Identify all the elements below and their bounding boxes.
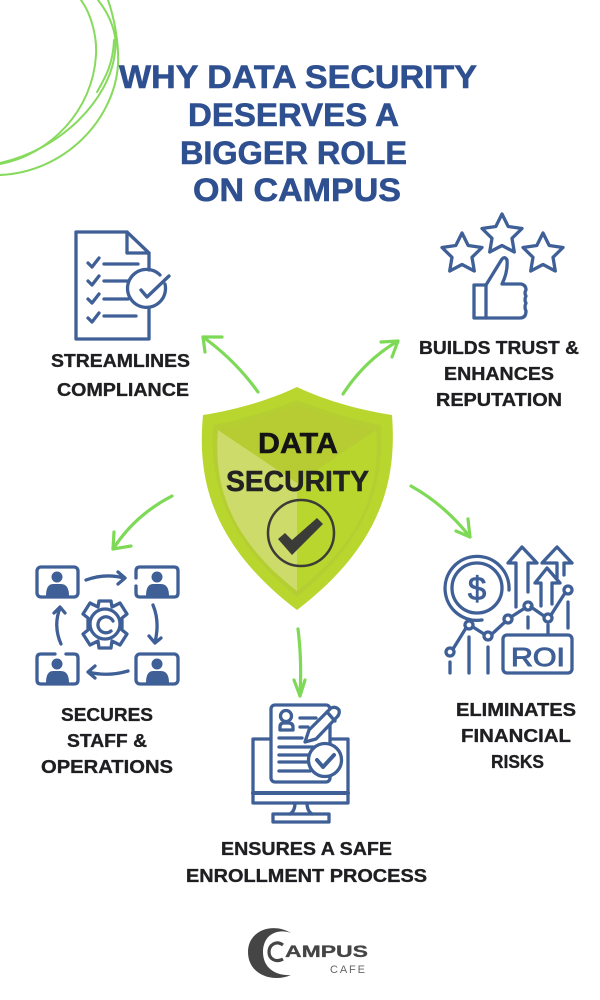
label: streamlines compliance: [51, 350, 190, 400]
title: WHY DATA SECURITY: [119, 59, 477, 95]
shield: data security: DATA: [258, 428, 338, 460]
label: secures staff: STAFF &: [67, 730, 147, 751]
icon: enrollment on monitor: [253, 705, 348, 822]
label: secures staff: SECURES: [61, 704, 153, 725]
label: ensures safe enrollment: [186, 838, 427, 886]
logo: Campus Cafe: AMPUS: [285, 942, 368, 961]
icon: ROI growth: [445, 547, 572, 673]
icon: ROI growth: ROI: [511, 642, 565, 672]
icon: compliance checklist: [76, 232, 169, 339]
title: DESERVES A: [188, 97, 399, 133]
label: streamlines compliance: STREAMLINES: [51, 350, 190, 371]
label: secures staff: OPERATIONS: [41, 756, 173, 777]
arrow: to trust: [343, 341, 398, 394]
title: [119, 59, 477, 208]
logo: Campus Cafe: CAFE: [330, 964, 365, 976]
title: ON CAMPUS: [193, 172, 401, 208]
label: streamlines compliance: COMPLIANCE: [57, 379, 189, 400]
arrow: to compliance: [203, 337, 258, 392]
arrow: to staff and operations: [113, 496, 172, 549]
label: builds trust: BUILDS TRUST &: [419, 337, 579, 358]
label: secures staff: [41, 704, 173, 777]
arrow: to enrollment: [294, 629, 305, 696]
label: eliminates financial risks: [456, 699, 576, 772]
label: eliminates financial risks: ELIMINATES: [456, 699, 576, 720]
icon: stars and thumbs up: [442, 214, 563, 318]
label: builds trust: [419, 337, 579, 410]
label: ensures safe enrollment: ENROLLMENT PROCESS: [186, 865, 427, 886]
label: ensures safe enrollment: ENSURES A SAFE: [221, 838, 392, 859]
arrow: to financial risks: [411, 486, 470, 537]
shield: data security: [202, 387, 393, 610]
label: builds trust: ENHANCES: [444, 363, 554, 384]
shield: data security: SECURITY: [226, 466, 369, 498]
label: builds trust: REPUTATION: [436, 389, 562, 410]
logo: Campus Cafe: [248, 928, 368, 978]
label: eliminates financial risks: RISKS: [491, 751, 544, 772]
title: BIGGER ROLE: [180, 135, 407, 171]
label: eliminates financial risks: FINANCIAL: [461, 725, 571, 746]
icon: ROI growth: $: [468, 570, 486, 607]
icon: staff workflow: [37, 567, 178, 684]
